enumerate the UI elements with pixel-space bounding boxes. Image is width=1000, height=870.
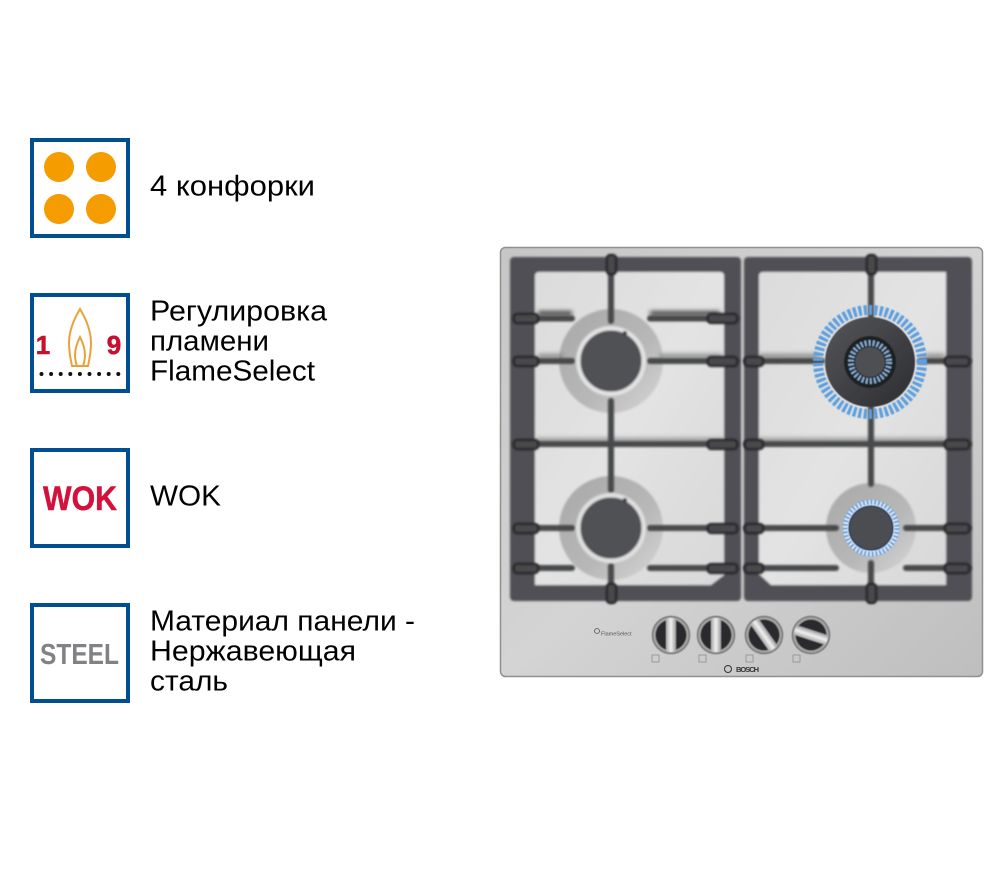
icon: four burners: [32, 140, 128, 236]
icon: WOK: [32, 450, 128, 546]
feature: WOK: [32, 450, 222, 546]
label: panel material: Материал панели -: [150, 606, 415, 638]
feature: panel material: [32, 605, 415, 701]
icon: flame regulation: 9: [107, 330, 121, 360]
label: flame regulation: FlameSelect: [150, 356, 315, 388]
icon: flame regulation: [32, 295, 128, 391]
feature: FlameSelect: [32, 295, 328, 391]
grate handles: [514, 255, 969, 603]
grate frames: [510, 257, 972, 601]
label: panel material: сталь: [150, 666, 228, 698]
bar shadows: [536, 311, 946, 442]
knob 1: [652, 616, 690, 654]
icon: flame regulation: 1: [36, 330, 50, 360]
knob 4: [788, 612, 834, 658]
burner rings: [559, 309, 916, 580]
product photo: gas hob: [500, 248, 982, 676]
label: flame regulation: пламени: [150, 326, 269, 358]
icon: WOK: WOK: [43, 480, 117, 518]
burner: small, lit: [843, 500, 899, 556]
burner: front-left (off): [576, 326, 646, 396]
label: burners count: 4 конфорки: [150, 170, 315, 202]
feature: 4 burners: [32, 140, 315, 236]
label: flame regulation: Регулировка: [150, 296, 328, 328]
grate bars: [515, 258, 969, 600]
label: panel material: Нержавеющая: [150, 636, 356, 668]
label: panel material: [150, 606, 415, 698]
knob position marks: [652, 655, 800, 662]
BOSCH logo: BOSCH: [736, 665, 759, 674]
control knobs: [652, 609, 834, 661]
FlameSelect logo: FlameSelect: [601, 632, 632, 638]
burner: wok, lit: [818, 310, 922, 414]
label: WOK: WOK: [150, 480, 222, 512]
FlameSelect logo: [594, 628, 632, 638]
knob 2: [698, 616, 734, 654]
icon: STEEL: [32, 605, 128, 701]
icon: STEEL: STEEL: [40, 639, 119, 671]
knob 3: [738, 609, 790, 661]
burner: rear-left (off): [576, 493, 646, 563]
label: flame regulation: [150, 296, 328, 388]
steel panel: [500, 248, 982, 676]
BOSCH logo: [724, 665, 759, 674]
